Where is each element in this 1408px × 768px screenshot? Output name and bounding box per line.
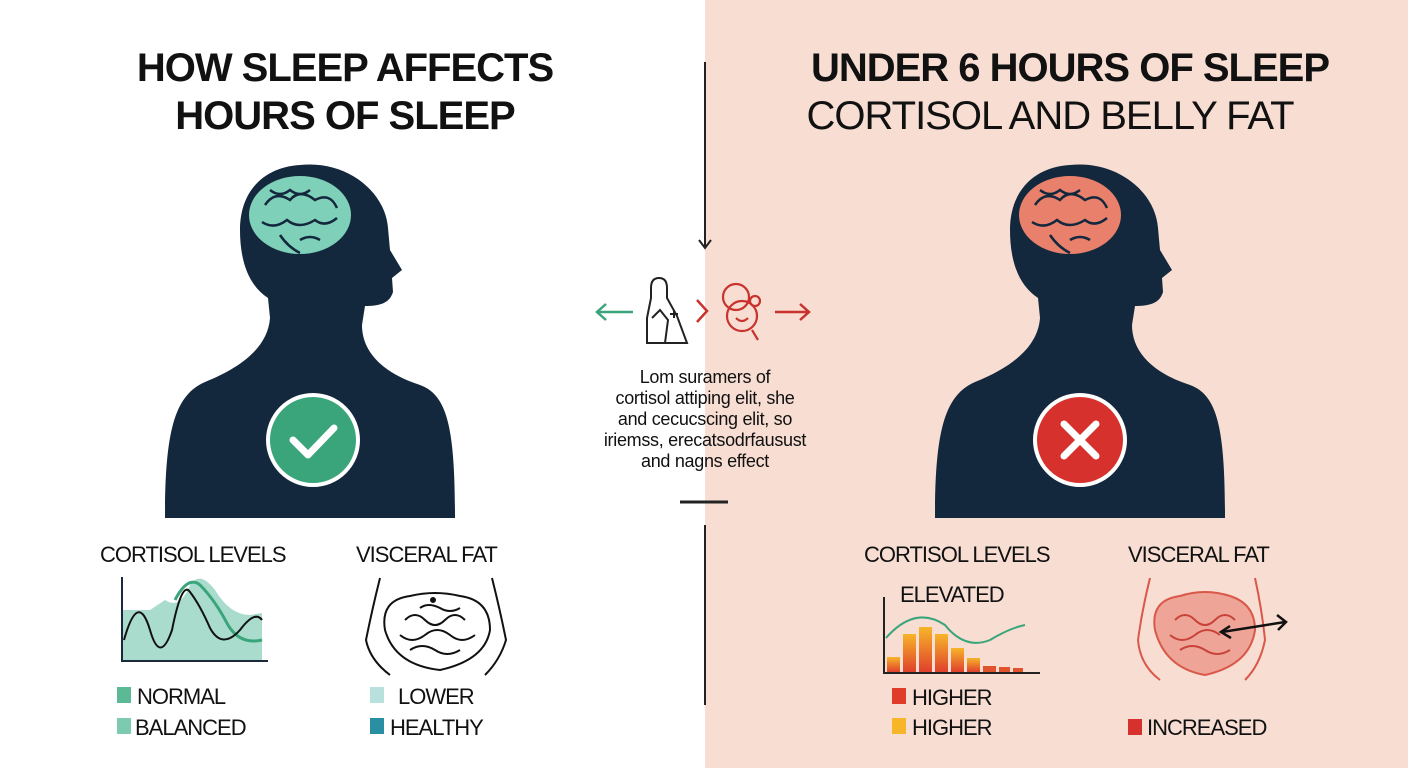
center text block: and cecucscing elit, so bbox=[618, 409, 792, 429]
text: VISCERAL FAT bbox=[1128, 542, 1269, 567]
center text block: Lom suramers of bbox=[640, 367, 770, 387]
figure: left silhouette bbox=[165, 164, 455, 518]
labels: right charts: CORTISOL LEVELS bbox=[864, 542, 1050, 567]
icon: x badge bbox=[1035, 395, 1125, 485]
title: right: UNDER 6 HOURS OF SLEEP bbox=[811, 46, 1329, 90]
chart: right cortisol bars bbox=[884, 597, 1040, 673]
legend squares right bbox=[892, 688, 1142, 735]
icon: face bbox=[723, 284, 760, 340]
icon: visceral fat right bbox=[1138, 578, 1265, 680]
text: NORMAL bbox=[137, 684, 225, 709]
icon: brain teal bbox=[248, 175, 352, 255]
center text block: iriemss, erecatsodrfausust bbox=[604, 430, 806, 450]
title: left bbox=[137, 46, 553, 138]
icon: check badge bbox=[268, 395, 358, 485]
figure: right silhouette bbox=[935, 164, 1225, 518]
arrow: green left bbox=[597, 304, 633, 320]
title: left: HOURS OF SLEEP bbox=[175, 94, 515, 138]
icon: chevron bbox=[697, 300, 707, 322]
icon: visceral fat left bbox=[366, 578, 506, 675]
text: BALANCED bbox=[135, 715, 246, 740]
arrow: red right bbox=[775, 304, 809, 320]
arrow: top vertical bbox=[699, 62, 711, 248]
text: HEALTHY bbox=[390, 715, 483, 740]
labels: left charts: CORTISOL LEVELS bbox=[100, 542, 286, 567]
chart: left cortisol bbox=[122, 577, 268, 661]
text: ELEVATED bbox=[900, 582, 1004, 607]
title: right: CORTISOL AND BELLY FAT bbox=[806, 94, 1294, 138]
center text block: cortisol attiping elit, she bbox=[616, 388, 794, 408]
center text block bbox=[604, 367, 806, 471]
center icons bbox=[597, 278, 809, 343]
divider lower bbox=[680, 502, 728, 705]
icon: brain red bbox=[1018, 175, 1122, 255]
icon: figure bbox=[647, 278, 687, 343]
legend squares left bbox=[117, 687, 384, 734]
arrow: double black bbox=[1221, 615, 1286, 638]
title: right bbox=[806, 46, 1329, 138]
text: HIGHER bbox=[912, 715, 992, 740]
background: right panel bbox=[705, 0, 1408, 768]
text: LOWER bbox=[398, 684, 474, 709]
text: HIGHER bbox=[912, 685, 992, 710]
title: left: HOW SLEEP AFFECTS bbox=[137, 46, 553, 90]
text: VISCERAL FAT bbox=[356, 542, 497, 567]
text: INCREASED bbox=[1147, 715, 1266, 740]
center text block: and nagns effect bbox=[641, 451, 769, 471]
